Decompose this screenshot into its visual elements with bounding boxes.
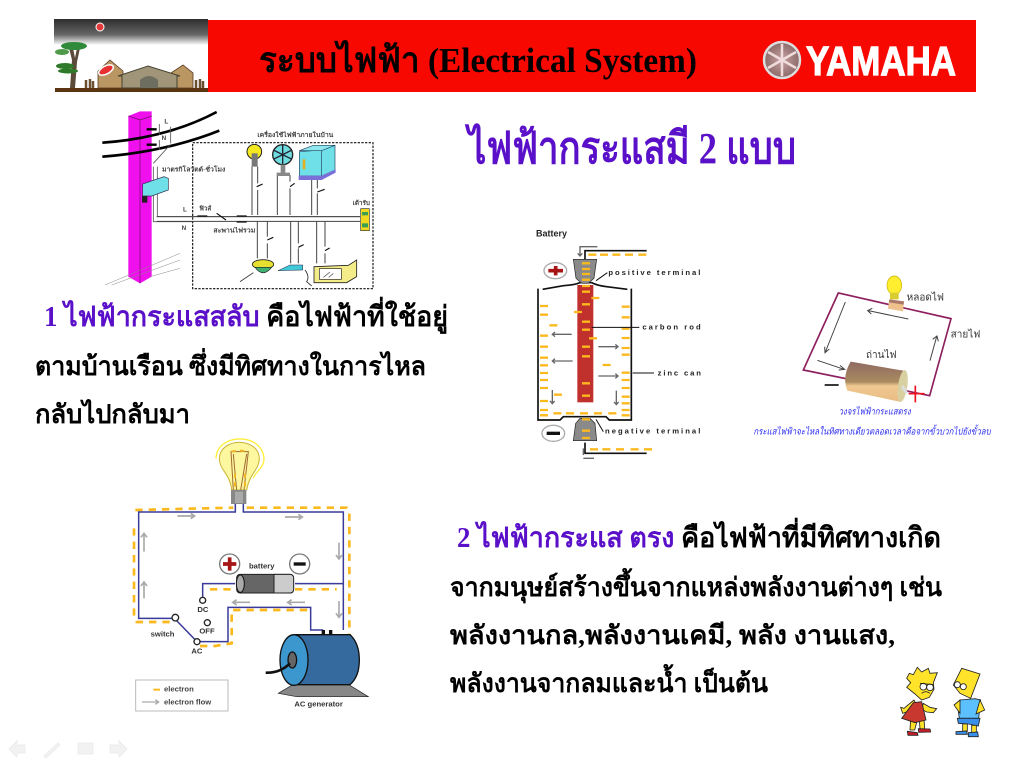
minus symbol <box>290 554 310 574</box>
circuit labels: ถ่านไฟ <box>866 349 897 361</box>
diagram labels <box>151 561 343 709</box>
minus symbol <box>542 425 565 441</box>
text block: alternating current: 1 ไฟฟ้ากระแสสลับ คือไฟฟ้าที่ใช้อยู่ <box>44 296 448 334</box>
arrows <box>141 513 342 617</box>
text block: direct current: จากมนุษย์สร้างขึ้นจากแหล่งพลังงานต่างๆ เช่น <box>450 567 942 604</box>
iron <box>278 265 303 271</box>
text block: direct current: พลังงานกล,พลังงานเคมี, พลัง งานแสง, <box>450 621 895 650</box>
diagram labels: battery <box>249 561 275 570</box>
legend: electron <box>164 685 194 694</box>
wiring labels: เครื่องใช้ไฟฟ้าภายในบ้าน <box>257 130 334 139</box>
logo: Yamaha: YAMAHA <box>806 38 956 84</box>
cell battery <box>845 362 910 402</box>
cartoon characters <box>901 667 985 737</box>
diagram labels: AC <box>191 646 203 655</box>
plus symbol <box>220 554 240 574</box>
wiring labels: N <box>162 135 167 142</box>
circuit caption <box>753 405 992 437</box>
text block: alternating current: กลับไปกลับมา <box>35 398 190 429</box>
circuit labels: สายไฟ <box>951 329 980 341</box>
circuit wires <box>139 504 343 642</box>
icon: previous arrow <box>9 741 25 757</box>
diagram labels: DC <box>197 605 209 614</box>
text block: direct current <box>450 517 942 698</box>
battery labels: carbon rod <box>642 323 701 332</box>
wiring labels: สะพานไฟรวม <box>213 226 255 235</box>
battery label: Battery <box>536 229 567 239</box>
wiring labels: เต้ารับ <box>353 198 370 207</box>
wall socket <box>361 209 369 231</box>
bulb <box>887 276 904 311</box>
logo: Yamaha <box>764 38 956 84</box>
text block: direct current: 2 ไฟฟ้ากระแส ตรง คือไฟฟ้าที่มีทิศทางเกิด <box>457 517 941 554</box>
wiring labels <box>162 119 370 235</box>
wiring labels: N <box>182 225 187 232</box>
icon: pen <box>44 743 60 758</box>
flow arrows <box>550 247 619 458</box>
battery labels: negative terminal <box>605 427 700 436</box>
rice cooker <box>240 260 274 282</box>
circuit labels: หลอดไฟ <box>907 291 944 303</box>
small battery <box>236 574 294 593</box>
refrigerator <box>299 145 336 180</box>
carbon rod <box>577 285 593 402</box>
header illustration: houses under storm clouds <box>54 19 208 92</box>
legend <box>136 680 228 711</box>
text block: alternating current <box>35 296 448 429</box>
boy character <box>953 668 985 737</box>
icon: menu <box>78 743 93 754</box>
heading: two kinds of current: ไฟฟ้ากระแสมี 2 แบบ <box>465 122 796 173</box>
wiring labels: มาตรกิโลวัตต์-ชั่วโมง <box>162 165 225 174</box>
electrons path <box>134 508 349 646</box>
wiring labels: L <box>183 207 187 214</box>
light bulb <box>216 439 264 504</box>
diagram: battery cross-section <box>536 229 701 458</box>
utility pole <box>128 111 152 283</box>
house wiring boundary <box>193 143 373 289</box>
text block: direct current: พลังงานจากลมและน้ำ เป็นต้น <box>450 663 768 698</box>
diagram labels: AC generator <box>294 700 343 709</box>
legend: electron flow <box>164 697 211 706</box>
plus symbol <box>544 263 567 279</box>
wiring labels: L <box>164 119 168 126</box>
AC generator <box>266 630 368 697</box>
fan <box>273 145 293 176</box>
electric meter <box>143 177 168 196</box>
header banner <box>54 19 976 92</box>
icon: next arrow <box>110 741 127 757</box>
diagram labels: OFF <box>199 627 215 636</box>
battery labels: zinc can <box>658 369 701 378</box>
power lines <box>102 112 219 157</box>
slideshow navigation icons <box>9 741 127 758</box>
battery labels <box>605 268 701 436</box>
battery casing <box>538 283 631 420</box>
current arrows <box>817 302 938 370</box>
battery labels: positive terminal <box>608 268 700 277</box>
text block: alternating current: ตามบ้านเรือน ซึ่งมีทิศทางในการไหล <box>35 347 426 381</box>
diagram: household AC wiring <box>102 111 373 289</box>
circuit caption: วงจรไฟฟ้ากระแสตรง <box>839 405 912 417</box>
wiring labels: ฟิวส์ <box>199 205 211 213</box>
terminal symbols <box>825 385 925 402</box>
switch contacts <box>172 597 210 645</box>
diagram labels: switch <box>151 630 175 639</box>
circuit labels <box>866 291 980 361</box>
house circuit wiring <box>157 167 360 263</box>
girl character <box>901 667 937 735</box>
microwave oven <box>314 260 357 283</box>
diagram: DC bulb circuit <box>753 276 992 437</box>
diagram: AC/DC switch circuit with generator <box>134 439 368 711</box>
electrons <box>540 255 652 449</box>
lamp <box>247 144 262 167</box>
header title: ระบบไฟฟ้า (Electrical System) <box>259 39 697 80</box>
circuit wire <box>803 293 951 396</box>
